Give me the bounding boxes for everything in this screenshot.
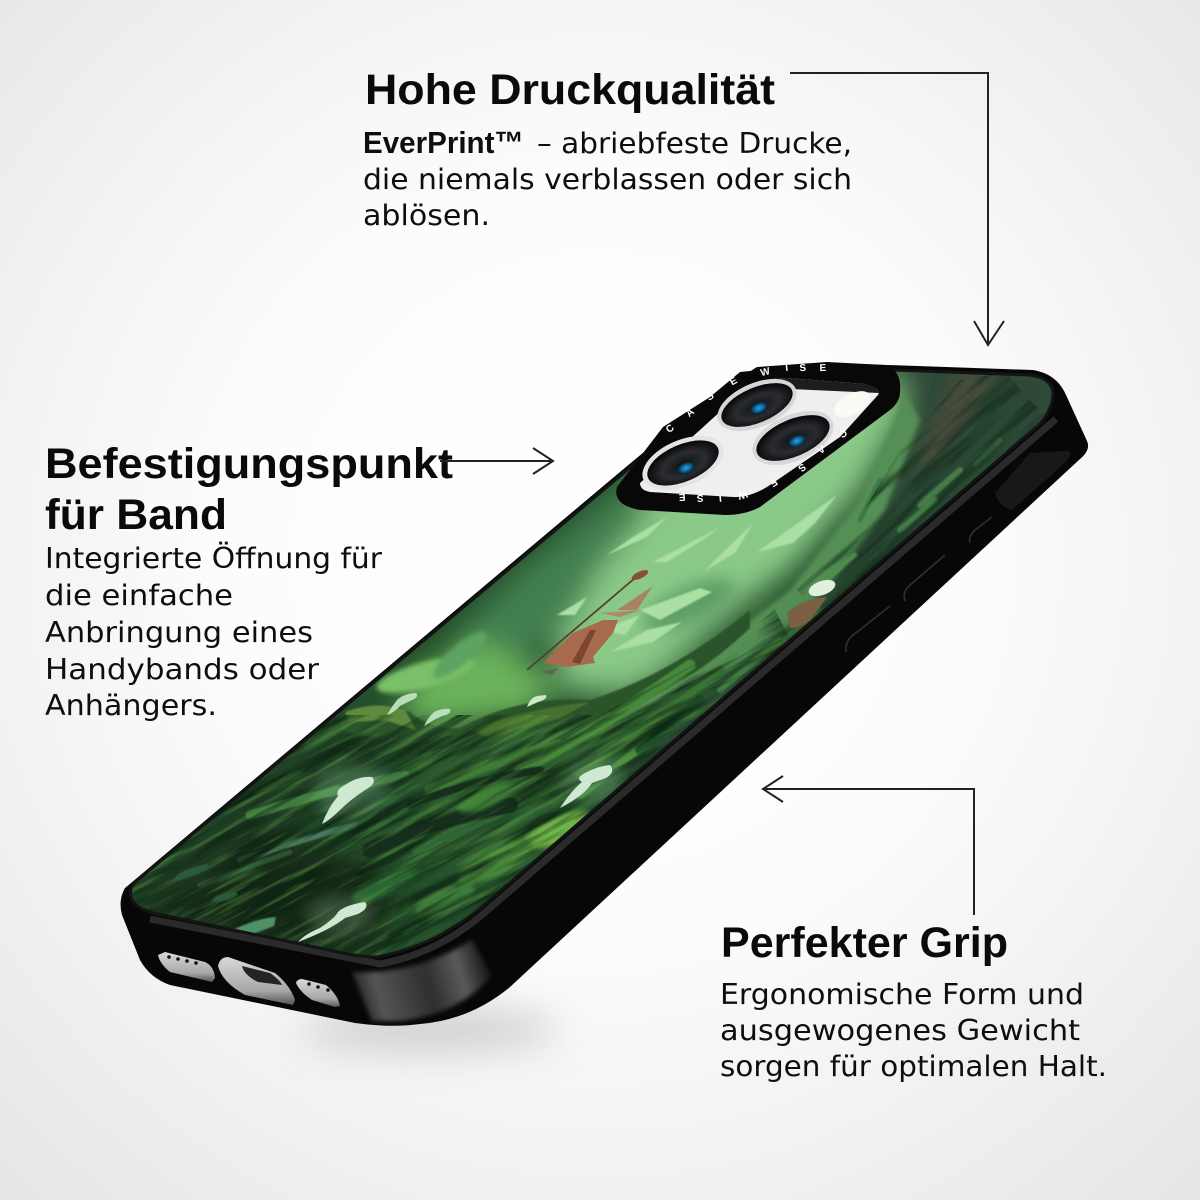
- bright foreground moss: [348, 625, 598, 924]
- arrow: print quality to case back: [790, 73, 1004, 345]
- phone case with printed artwork: [120, 362, 1088, 1026]
- ring lettering: W: [736, 488, 749, 501]
- ring lettering: S: [795, 461, 808, 474]
- cloak: [543, 620, 618, 667]
- description: Anbringung eines: [45, 616, 313, 649]
- mossy log band: [340, 610, 750, 745]
- ring lettering: I: [785, 363, 789, 374]
- ring lettering: A: [684, 407, 697, 420]
- ring lettering: E: [678, 491, 686, 502]
- ring lettering: [664, 363, 849, 503]
- description: sorgen für optimalen Halt.: [720, 1050, 1107, 1083]
- description: die einfache: [45, 579, 233, 612]
- spear: [527, 578, 635, 670]
- bottom port: right speaker: [296, 979, 340, 1007]
- heading: Perfekter Grip: [721, 919, 1008, 967]
- side strap opening: [995, 451, 1070, 510]
- description: [363, 125, 852, 232]
- description: [45, 541, 382, 722]
- bottom port: charging: [218, 957, 295, 1005]
- ring lettering: C: [664, 423, 677, 436]
- flash: [830, 386, 874, 422]
- inner shadow: [747, 378, 879, 393]
- description: Integrierte Öffnung für: [45, 541, 382, 575]
- case body: [121, 363, 1088, 1026]
- ring lettering: S: [696, 492, 704, 503]
- description: Handybands oder: [45, 653, 319, 686]
- light shafts: [557, 496, 836, 652]
- spirit: small left: [387, 693, 417, 715]
- side button: lower volume: [846, 606, 890, 652]
- artwork: forest scene: [132, 372, 1052, 956]
- description: EverPrint™: [363, 125, 524, 160]
- callout: Hohe Druckqualität: [363, 66, 852, 232]
- artwork base: [132, 372, 918, 956]
- artwork colour masses: [120, 350, 1070, 960]
- spirit: right: [560, 758, 627, 808]
- phone drop shadow: [300, 1010, 560, 1050]
- green strip at light zone edge: [600, 395, 920, 720]
- case bevel lines: [150, 419, 1056, 964]
- description: – abriebfeste Drucke,: [537, 127, 852, 160]
- spirit: bottom: [298, 895, 374, 942]
- arrow: grip to case side: [763, 776, 974, 915]
- description: [720, 978, 1107, 1083]
- spirit: small far: [527, 695, 546, 707]
- ring lettering: I: [718, 492, 722, 503]
- heading: [45, 440, 453, 539]
- mushroom spirit on the right: [787, 577, 838, 628]
- hat cone: [617, 586, 653, 610]
- side button: upper volume: [904, 555, 945, 601]
- ring lettering: S: [799, 363, 807, 374]
- heading: Befestigungspunkt: [45, 440, 453, 488]
- moss clusters on the dark panel: [720, 440, 1000, 690]
- callout: Perfekter Grip: [720, 919, 1107, 1083]
- lens: left: [634, 425, 732, 501]
- dark green forest band near edge: [640, 418, 1004, 766]
- screen edge: [130, 370, 1053, 957]
- description: Ergonomische Form und: [720, 978, 1084, 1011]
- ring lettering: E: [819, 363, 827, 374]
- moss streaks: [200, 665, 720, 885]
- spirit: small centre: [424, 709, 450, 726]
- bottom port: left speaker: [158, 952, 215, 982]
- lens: right: [744, 400, 842, 476]
- foreground bottom-left plants: [174, 862, 276, 938]
- painterly brush texture: [132, 362, 1042, 956]
- arrow: strap attachment point: [440, 448, 553, 474]
- ring lettering: E: [728, 375, 740, 388]
- traveller figure: [527, 568, 653, 675]
- ring lettering: W: [759, 366, 772, 379]
- ring lettering: C: [836, 426, 849, 440]
- description: ausgewogenes Gewicht: [720, 1014, 1080, 1047]
- ring lettering: S: [705, 390, 717, 403]
- heading: für Band: [45, 491, 227, 539]
- lens: top: [710, 368, 804, 442]
- case corner highlight: [352, 940, 492, 1021]
- camera window: [640, 378, 879, 497]
- feet: [540, 668, 558, 675]
- heading: Hohe Druckqualität: [365, 66, 775, 114]
- brown tree streak: [918, 374, 996, 468]
- ring lettering: E: [767, 476, 779, 489]
- spirit: large left: [314, 764, 390, 824]
- description: Anhängers.: [45, 689, 217, 722]
- description: die niemals verblassen oder sich: [363, 163, 852, 196]
- description: ablösen.: [363, 199, 490, 232]
- mid-green ground patch: [640, 572, 738, 638]
- ring lettering: A: [814, 442, 827, 456]
- hat brim: [600, 610, 642, 617]
- callout: Befestigungspunkt für Band: [45, 440, 453, 722]
- side button: action: [970, 517, 992, 543]
- camera ring: [616, 362, 900, 515]
